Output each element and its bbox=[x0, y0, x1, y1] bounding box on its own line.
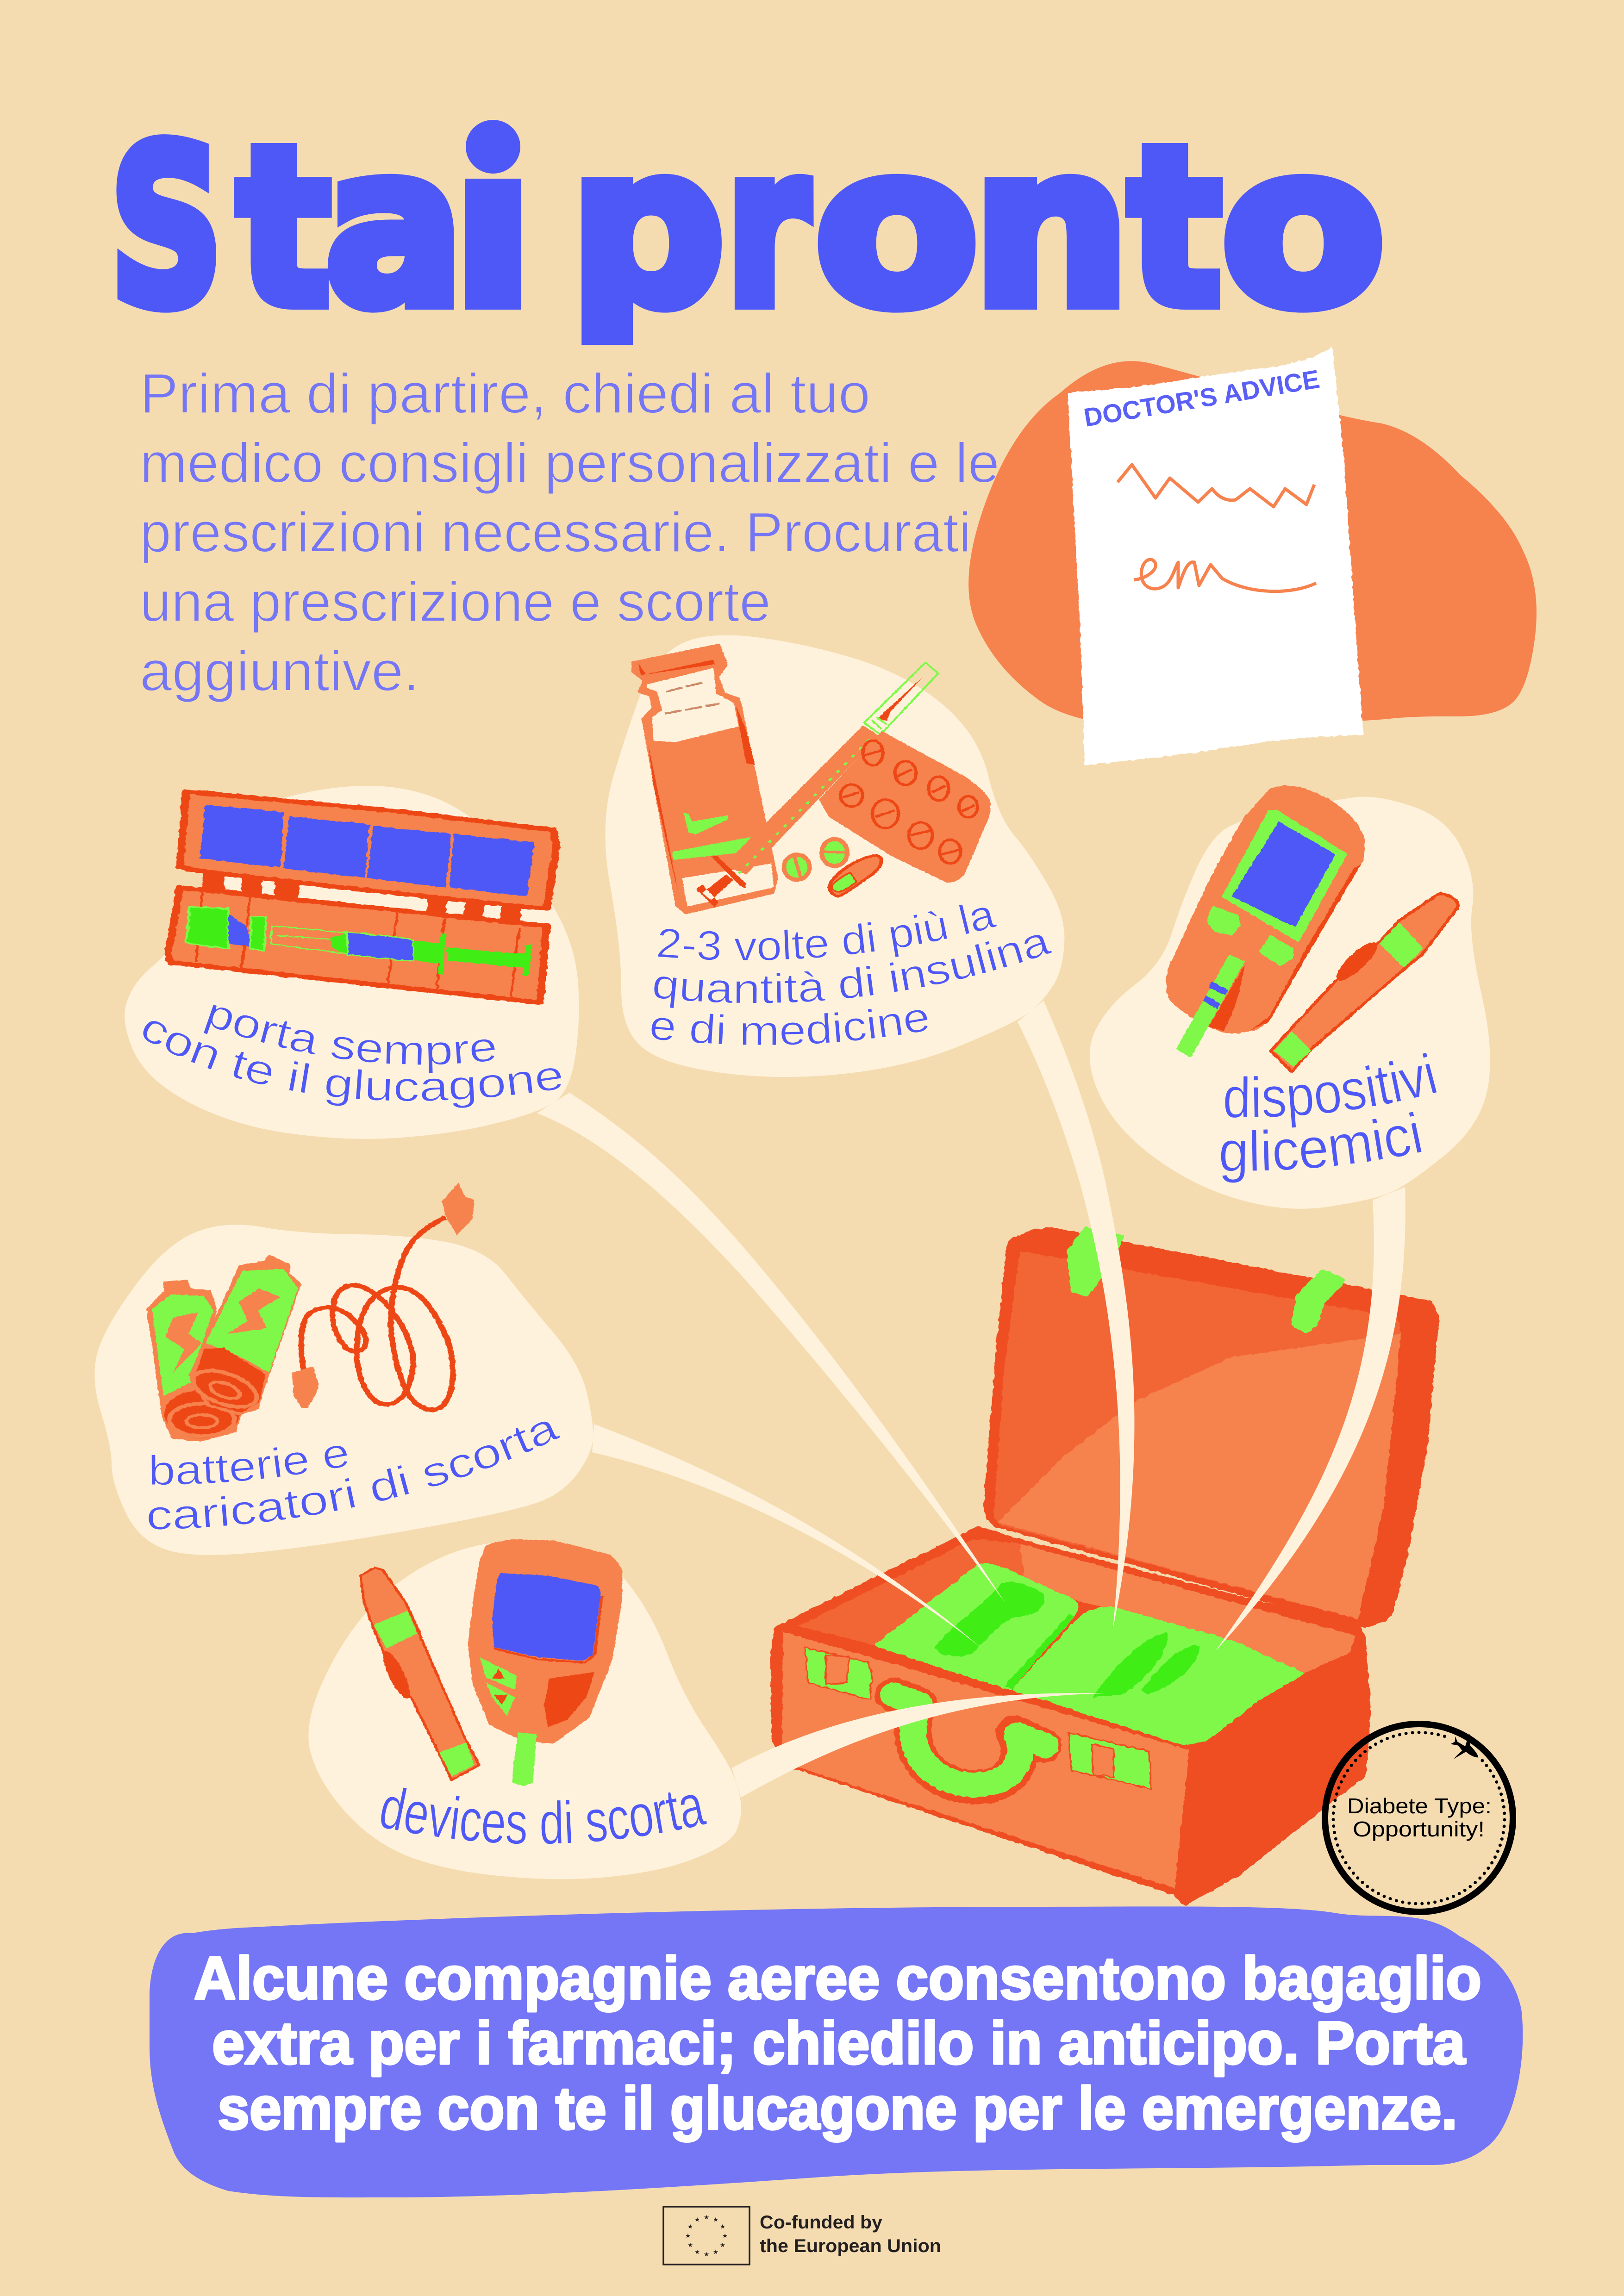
panel text: Alcune compagnie aeree consentono bagaglio bbox=[194, 1944, 1481, 2012]
syringe bbox=[696, 662, 938, 908]
title: p bbox=[570, 101, 725, 354]
label: batteries: batterie e bbox=[148, 1429, 353, 1494]
bubble: glycemic devices bbox=[1090, 797, 1490, 1209]
title: a bbox=[325, 101, 463, 354]
title: n bbox=[973, 101, 1130, 354]
bottom plug bbox=[292, 1367, 319, 1408]
spare lancet bbox=[361, 1568, 479, 1780]
stamp bbox=[1325, 1724, 1513, 1912]
spare meter bbox=[468, 1539, 622, 1786]
blue panes bbox=[199, 805, 534, 896]
test strip bbox=[1177, 956, 1244, 1056]
label: glucagon: porta sempre bbox=[200, 989, 500, 1075]
case base bbox=[168, 888, 547, 1002]
bubble: medicine bbox=[606, 635, 1064, 1077]
tail: spare devices bbox=[732, 1693, 1105, 1798]
panel text: extra per i farmaci; chiedilo in anticipo. Porta bbox=[212, 2009, 1466, 2077]
hinges bbox=[203, 872, 522, 925]
case lid bbox=[180, 791, 556, 908]
meter edge bbox=[1209, 864, 1362, 1031]
icon: glucose meter and lancet bbox=[1166, 785, 1458, 1072]
stamp: Opportunity! bbox=[1353, 1817, 1485, 1841]
icon: plane bbox=[1450, 1734, 1478, 1759]
dark green patches bbox=[934, 1581, 1199, 1697]
title: o bbox=[1222, 101, 1385, 354]
paper sheet bbox=[1068, 347, 1363, 765]
doctor's advice illustration bbox=[968, 347, 1537, 765]
intro text: medico consigli personalizzati e le bbox=[140, 431, 999, 494]
icon: medicine bbox=[633, 645, 991, 913]
meter buttons bbox=[1209, 908, 1292, 965]
funding text bbox=[760, 2212, 941, 2256]
loose pills bbox=[782, 837, 881, 896]
intro text: una prescrizione e scorte bbox=[140, 570, 771, 633]
pointer tails bbox=[537, 1001, 1405, 1798]
label: spare devices: devices di scorta bbox=[374, 1770, 710, 1857]
title: o bbox=[815, 101, 978, 354]
title: t bbox=[1129, 101, 1221, 354]
funding text: Co-funded by bbox=[760, 2212, 883, 2233]
panel text: sempre con te il glucagone per le emergenze. bbox=[218, 2074, 1457, 2142]
intro text: aggiuntive. bbox=[140, 640, 419, 703]
label: glycemic devices: dispositivi bbox=[1223, 1042, 1443, 1130]
scribble two bbox=[1134, 560, 1316, 591]
stamp dotted route bbox=[1333, 1732, 1505, 1904]
lid outer bbox=[987, 1231, 1436, 1624]
vial bbox=[633, 645, 776, 913]
panel text bbox=[194, 1944, 1481, 2142]
tail: medicine bbox=[1018, 1001, 1134, 1629]
base interior bbox=[1020, 1543, 1355, 1674]
title: S bbox=[110, 101, 223, 354]
title: i bbox=[453, 101, 533, 354]
tail: batteries bbox=[592, 1424, 981, 1648]
icon: spare meter and lancet bbox=[361, 1539, 622, 1786]
label: medicine: 2-3 volte di più la bbox=[655, 890, 1000, 970]
syringe bbox=[186, 907, 532, 976]
bubble: glucagon bbox=[125, 786, 579, 1139]
meter body bbox=[1166, 785, 1365, 1033]
tail: glucagon bbox=[537, 1093, 1005, 1603]
front latches bbox=[806, 1648, 1151, 1789]
battery left bbox=[148, 1281, 240, 1440]
label: batteries: caricatori di scorta bbox=[145, 1403, 565, 1539]
intro text bbox=[140, 362, 999, 703]
lid clips bbox=[1070, 1230, 1343, 1330]
suitcase bbox=[773, 1230, 1436, 1904]
label: medicine: e di medicine bbox=[647, 993, 933, 1054]
bubble: batteries bbox=[94, 1225, 593, 1555]
EU flag outline bbox=[663, 2207, 750, 2265]
EU stars bbox=[686, 2215, 727, 2256]
funding text: the European Union bbox=[760, 2236, 941, 2256]
icon: batteries and cable bbox=[148, 1182, 475, 1440]
intro text: Prima di partire, chiedi al tuo bbox=[140, 362, 870, 425]
footer: EU co-funding mark bbox=[663, 2207, 941, 2265]
green contents bbox=[877, 1565, 1301, 1744]
stamp text: Diabete Type: bbox=[1347, 1794, 1492, 1818]
title: t bbox=[237, 101, 330, 354]
lancet bbox=[1271, 893, 1458, 1072]
bubble: spare devices bbox=[308, 1540, 741, 1879]
scribble one bbox=[1118, 465, 1314, 507]
cable bbox=[301, 1218, 453, 1410]
lid inner bbox=[994, 1251, 1401, 1619]
battery right bbox=[185, 1256, 300, 1414]
title: r bbox=[726, 101, 810, 354]
stamp ring bbox=[1325, 1724, 1513, 1912]
label: glycemic devices bbox=[1218, 1042, 1443, 1184]
lid lit area bbox=[998, 1334, 1401, 1619]
label: medicine bbox=[647, 890, 1056, 1054]
doctor's advice label: DOCTOR'S ADVICE bbox=[1082, 364, 1322, 432]
front face bbox=[782, 1632, 1189, 1888]
meter screen bbox=[1223, 812, 1346, 940]
panel: airline tip bbox=[150, 1906, 1523, 2197]
blister bbox=[819, 731, 991, 883]
base body bbox=[773, 1529, 1368, 1904]
title bbox=[116, 120, 1382, 345]
orange blob bbox=[968, 361, 1537, 728]
intro text: prescrizioni necessarie. Procurati bbox=[140, 501, 971, 564]
tail: meter bbox=[1215, 1187, 1405, 1651]
icon: glucagon case bbox=[168, 791, 556, 1002]
label: glucagon: con te il glucagone bbox=[133, 1003, 567, 1110]
label: glycemic devices: glicemici bbox=[1218, 1101, 1428, 1184]
panel shape bbox=[150, 1906, 1523, 2197]
label: medicine: quantità di insulina bbox=[650, 917, 1056, 1013]
handle bbox=[893, 1695, 1043, 1787]
compartment lines bbox=[196, 891, 519, 999]
top plug bbox=[442, 1182, 475, 1235]
